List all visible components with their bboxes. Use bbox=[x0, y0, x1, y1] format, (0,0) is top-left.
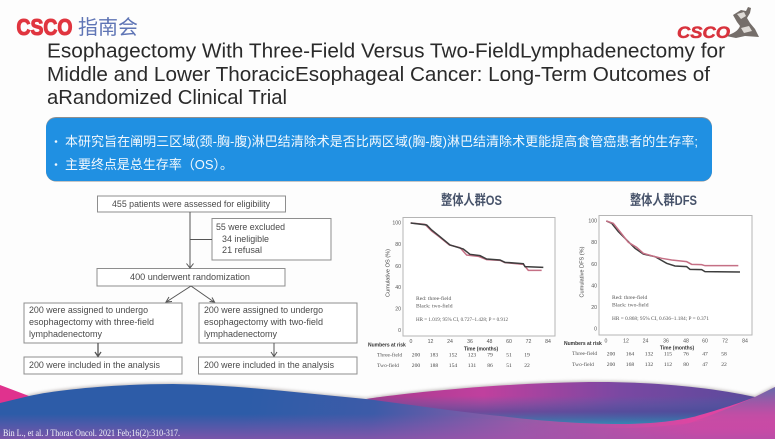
box: randomization bbox=[97, 268, 285, 286]
numbers at risk: 200 bbox=[607, 362, 615, 368]
numbers at risk: 200 bbox=[412, 352, 420, 358]
y axis labels: 20 bbox=[591, 305, 597, 311]
numbers at risk: 22 bbox=[721, 362, 727, 368]
y axis labels: 60 bbox=[591, 262, 597, 268]
y axis title: Cumulative OS (%) bbox=[386, 249, 392, 297]
box: three-field arm: 200 were assigned to undergo bbox=[29, 305, 148, 315]
box: three-field arm: esophagectomy with three-field bbox=[29, 317, 154, 327]
x axis labels: 84 bbox=[742, 338, 748, 344]
numbers at risk bbox=[368, 342, 530, 369]
logo: CSCO guideline committee bbox=[16, 14, 138, 40]
y axis labels: 0 bbox=[398, 328, 401, 334]
logo: CSCO guideline committee: 指南会 bbox=[78, 16, 138, 39]
legend: Black: two-field bbox=[416, 302, 453, 310]
title bbox=[47, 40, 725, 109]
box: two-field arm: lymphadenectomy bbox=[204, 329, 277, 339]
y axis labels bbox=[392, 220, 401, 334]
box: two-field arm: 200 were assigned to undergo bbox=[204, 305, 323, 315]
legend: Red: three-field bbox=[416, 295, 451, 302]
chart: overall OS bbox=[368, 218, 555, 369]
box: excluded: 34 ineligible bbox=[222, 234, 269, 244]
legend: Black: two-field bbox=[612, 302, 649, 308]
numbers at risk: 47 bbox=[702, 352, 708, 358]
y axis labels: 80 bbox=[395, 242, 401, 248]
numbers at risk: 123 bbox=[468, 352, 476, 358]
y axis labels: 40 bbox=[395, 285, 401, 291]
y axis labels: 100 bbox=[588, 218, 597, 224]
y axis labels: 60 bbox=[395, 264, 401, 270]
x axis labels: 0 bbox=[410, 339, 413, 345]
x axis labels: 60 bbox=[506, 339, 512, 345]
x axis title: Time (months) bbox=[464, 346, 499, 352]
panel: study objective bbox=[46, 117, 712, 182]
x axis labels: 24 bbox=[447, 339, 453, 345]
objective text: 主要终点是总生存率（OS）。 bbox=[65, 157, 233, 172]
x axis labels: 48 bbox=[487, 339, 492, 345]
numbers at risk: Numbers at risk bbox=[564, 341, 602, 347]
title: Esophagectomy With Three-Field Versus Two-FieldLymphadenectomy for bbox=[47, 40, 725, 62]
legend bbox=[416, 295, 508, 323]
box: three-field analysis: 200 were included in the analysis bbox=[29, 360, 160, 370]
box: excluded bbox=[212, 218, 331, 260]
numbers at risk: 51 bbox=[506, 352, 512, 358]
numbers at risk: 80 bbox=[683, 362, 689, 368]
numbers at risk: 112 bbox=[664, 362, 672, 368]
numbers at risk bbox=[564, 341, 727, 368]
numbers at risk: 152 bbox=[449, 352, 457, 358]
x axis labels: 48 bbox=[683, 338, 689, 344]
x axis labels: 60 bbox=[702, 338, 708, 344]
x axis labels: 36 bbox=[663, 338, 669, 344]
numbers at risk: Two-field bbox=[377, 362, 399, 369]
y axis labels: 80 bbox=[591, 240, 597, 246]
numbers at risk: 131 bbox=[468, 363, 476, 369]
chart heading: OS: 整体人群OS bbox=[441, 192, 502, 208]
numbers at risk: 19 bbox=[524, 352, 530, 358]
numbers at risk: 51 bbox=[506, 363, 512, 369]
numbers at risk: 47 bbox=[702, 362, 708, 368]
box: randomization: 400 underwent randomization bbox=[130, 272, 250, 282]
numbers at risk: 168 bbox=[626, 362, 634, 368]
y axis labels: 20 bbox=[395, 306, 401, 312]
x axis labels: 12 bbox=[623, 338, 629, 344]
objective text bbox=[55, 134, 698, 172]
box: three-field analysis bbox=[24, 357, 182, 374]
box: two-field arm: esophagectomy with two-field bbox=[204, 317, 323, 327]
y axis labels: 40 bbox=[591, 284, 597, 290]
x axis labels: 84 bbox=[545, 339, 551, 345]
box: three-field arm bbox=[24, 303, 182, 343]
survival curves bbox=[411, 223, 543, 270]
box: two-field arm bbox=[199, 303, 357, 343]
numbers at risk: Numbers at risk bbox=[368, 342, 406, 348]
x axis labels: 24 bbox=[643, 338, 648, 344]
numbers at risk: 58 bbox=[721, 352, 727, 358]
numbers at risk: 86 bbox=[487, 363, 493, 369]
legend: Red: three-field bbox=[612, 294, 647, 301]
logo: CSCO guideline committee: CSCO bbox=[16, 14, 72, 40]
box: two-field analysis bbox=[198, 357, 357, 374]
numbers at risk: Two-field bbox=[572, 361, 594, 368]
numbers at risk: 132 bbox=[645, 352, 653, 358]
title: aRandomized Clinical Trial bbox=[47, 87, 287, 109]
numbers at risk: 76 bbox=[683, 352, 689, 358]
numbers at risk: Three-field bbox=[377, 352, 402, 358]
legend: HR = 0.868; 95% CI, 0.636–1.184; P = 0.371 bbox=[612, 316, 709, 322]
flow diagram bbox=[24, 196, 357, 374]
numbers at risk: 200 bbox=[607, 352, 615, 358]
box: assessed bbox=[98, 196, 286, 212]
citation: Bin L., et al. J Thorac Oncol. 2021 Feb;16(2):310-317. bbox=[3, 428, 180, 439]
numbers at risk: 188 bbox=[430, 363, 438, 369]
numbers at risk: 164 bbox=[626, 352, 634, 358]
box: assessed: 455 patients were assessed for eligibility bbox=[112, 199, 270, 209]
title: Middle and Lower ThoracicEsophageal Cancer: Long-Term Outcomes of bbox=[47, 64, 710, 86]
numbers at risk: 22 bbox=[524, 363, 530, 369]
x axis labels: 72 bbox=[722, 338, 728, 344]
numbers at risk: 183 bbox=[430, 352, 438, 358]
x axis labels bbox=[605, 338, 748, 344]
numbers at risk: 200 bbox=[412, 363, 420, 369]
box: two-field analysis: 200 were included in the analysis bbox=[204, 360, 334, 370]
y axis labels: 100 bbox=[392, 220, 401, 226]
numbers at risk: 154 bbox=[449, 363, 457, 369]
survival curves bbox=[606, 221, 740, 272]
box: three-field arm: lymphadenectomy bbox=[29, 329, 102, 339]
x axis labels bbox=[410, 339, 551, 345]
x axis labels: 72 bbox=[526, 339, 531, 345]
x axis title: Time (months) bbox=[660, 346, 695, 352]
objective text: 本研究旨在阐明三区域(颈-胸-腹)淋巴结清除术是否比两区域(胸-腹)淋巴结清除术更能提高食管癌患者的生存率; bbox=[65, 134, 698, 149]
legend: HR = 1.019; 95% CI, 0.727–1.428; P = 0.912 bbox=[416, 317, 508, 323]
x axis labels: 12 bbox=[428, 339, 433, 345]
numbers at risk: Three-field bbox=[572, 350, 597, 357]
footer wave bbox=[0, 381, 775, 439]
logo: CSCO with statue bbox=[677, 7, 759, 42]
numbers at risk: 79 bbox=[487, 352, 493, 358]
arrows bbox=[95, 212, 277, 356]
y axis labels: 0 bbox=[594, 326, 597, 332]
y axis labels bbox=[588, 218, 597, 332]
chart heading: DFS: 整体人群DFS bbox=[630, 192, 697, 208]
logo: CSCO with statue: CSCO bbox=[677, 24, 730, 42]
chart: overall DFS bbox=[564, 216, 752, 368]
numbers at risk: 115 bbox=[664, 352, 672, 358]
x axis labels: 36 bbox=[467, 339, 473, 345]
legend bbox=[612, 294, 709, 322]
y axis title: Cumulative DFS (%) bbox=[580, 246, 586, 297]
box: excluded: 55 were excluded bbox=[216, 222, 285, 232]
box: excluded: 21 refusal bbox=[222, 245, 262, 255]
numbers at risk: 132 bbox=[645, 362, 653, 368]
x axis labels: 0 bbox=[605, 338, 608, 344]
